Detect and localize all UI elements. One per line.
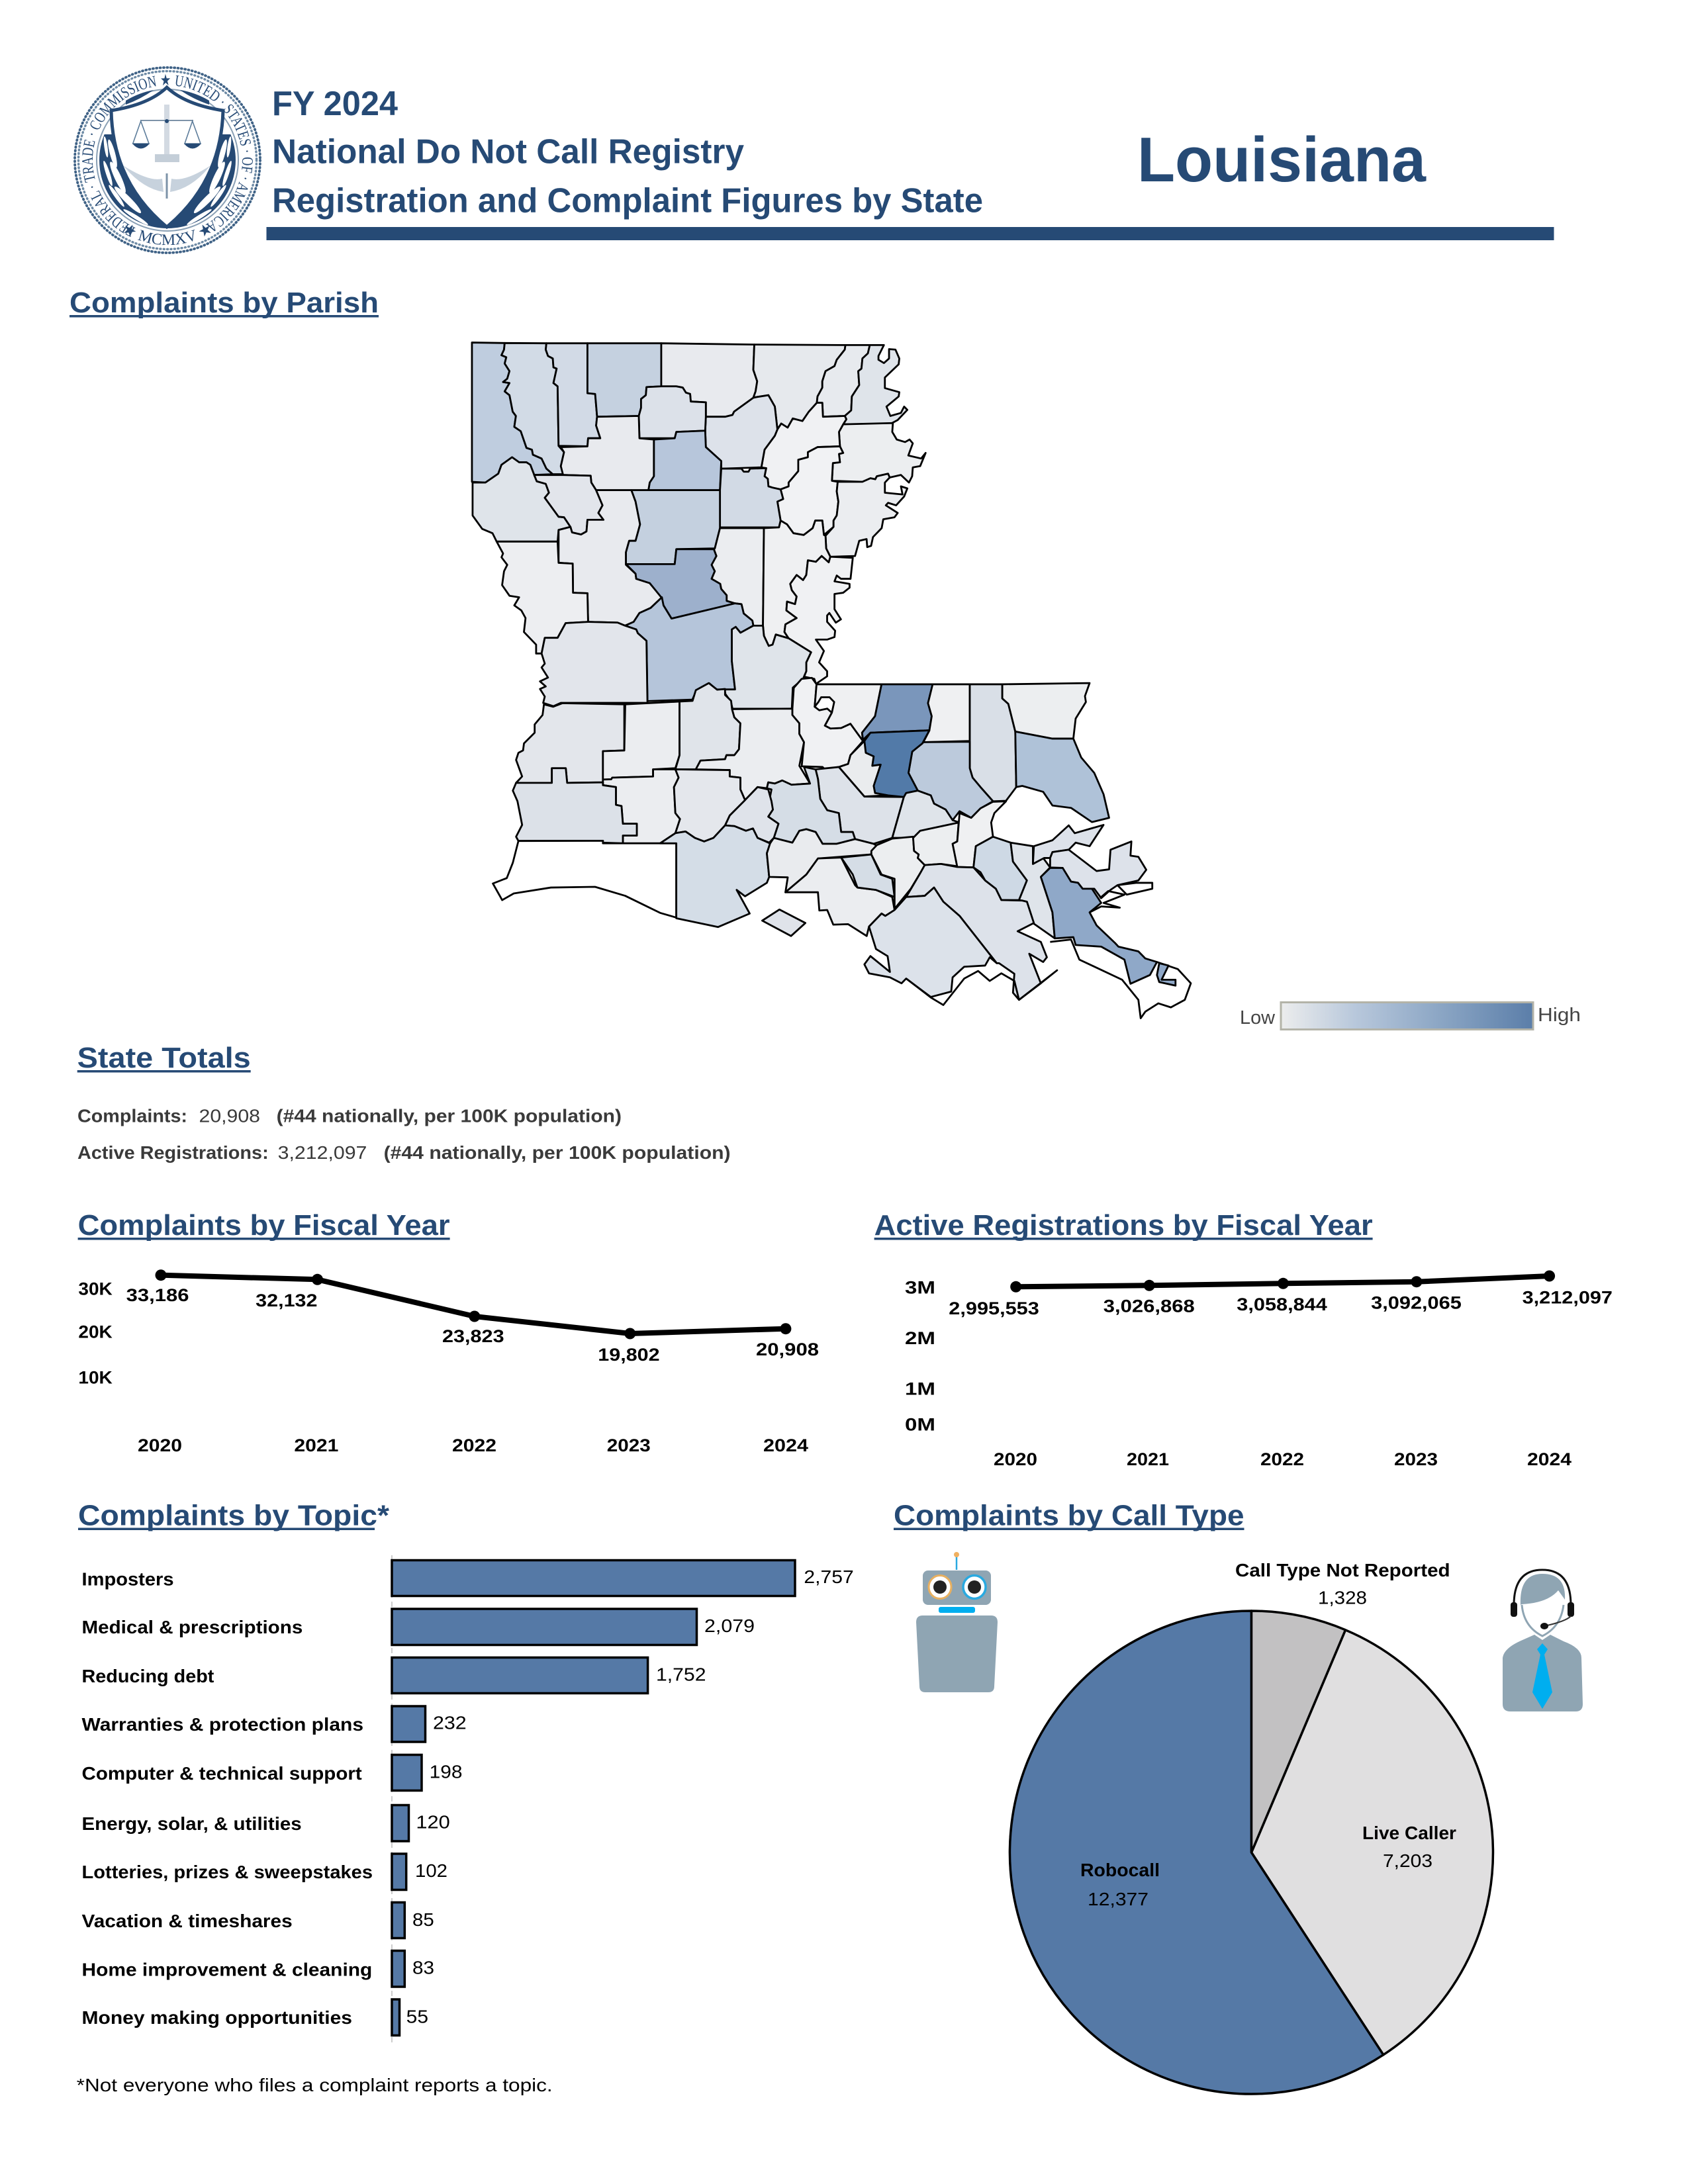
parish: Lincoln xyxy=(639,387,706,438)
topic: Lotteries, prizes & sweepstakes: 102 xyxy=(415,1860,447,1881)
parish: Calcasieu xyxy=(513,768,637,843)
data labels: 20,908 xyxy=(756,1340,819,1359)
x axis labels: 2020 xyxy=(138,1435,182,1455)
parish: Morehouse xyxy=(753,345,845,430)
parish: Terrebonne xyxy=(865,887,997,997)
topic: Lotteries, prizes & sweepstakes xyxy=(82,1854,447,1890)
x axis labels: 2023 xyxy=(1394,1449,1438,1469)
parish: St. Mary xyxy=(786,858,894,936)
heading: active registrations by fiscal year: Active Registrations by Fiscal Year xyxy=(874,1209,1373,1242)
parish: La Salle xyxy=(712,528,764,625)
data labels xyxy=(949,1287,1613,1318)
parish: Bienville xyxy=(561,416,654,490)
header rule xyxy=(266,227,1554,240)
heading: fiscal year: FY 2024 xyxy=(272,85,398,123)
x axis labels: 2022 xyxy=(452,1435,496,1455)
topic: Lotteries, prizes & sweepstakes: Lotteries, prizes & sweepstakes xyxy=(82,1862,373,1882)
topic: Medical & prescriptions: Medical & prescriptions xyxy=(82,1617,303,1637)
slice: live caller xyxy=(1251,1630,1493,2055)
bar axis xyxy=(391,1555,393,2042)
parish: Tangipahoa xyxy=(970,684,1016,801)
topic: Home improvement & cleaning xyxy=(82,1951,434,1987)
data labels xyxy=(126,1285,819,1365)
x axis labels: 2020 xyxy=(994,1449,1037,1469)
parish: Washington xyxy=(1002,683,1090,739)
footnote: *Not everyone who files a complaint reports a topic. xyxy=(77,2075,553,2095)
topic: Money making opportunities: 55 xyxy=(406,2007,428,2027)
topic: Imposters xyxy=(82,1561,854,1596)
state totals: active registrations: Active Registrations: xyxy=(77,1142,269,1163)
parish: Lafourche xyxy=(906,864,1047,1000)
topic: Money making opportunities xyxy=(82,1999,428,2036)
topic: Warranties & protection plans: Warranties & protection plans xyxy=(82,1714,363,1735)
parish: Franklin xyxy=(777,446,843,535)
topic: Warranties & protection plans xyxy=(82,1706,467,1742)
parish: St. Charles xyxy=(953,801,1006,868)
parish: Concordia xyxy=(784,556,853,684)
coast: delta mouth xyxy=(1157,963,1176,985)
parish: Livingston xyxy=(908,742,993,820)
parish: Claiborne xyxy=(587,343,661,417)
parish: Assumption xyxy=(841,854,894,897)
state totals: complaints: Complaints: xyxy=(77,1106,187,1126)
legend: low label: Low xyxy=(1240,1007,1276,1028)
label: call type not reported: 1,328 xyxy=(1318,1587,1367,1608)
topic: Reducing debt: 1,752 xyxy=(656,1664,706,1685)
parish: West Baton Rouge xyxy=(839,741,888,797)
y axis labels: 0M xyxy=(905,1415,935,1435)
y axis labels: 3M xyxy=(905,1277,935,1297)
topic: Home improvement & cleaning: Home improvement & cleaning xyxy=(82,1960,372,1980)
parish: De Soto xyxy=(473,457,571,541)
x axis labels: 2024 xyxy=(1527,1449,1571,1469)
legend: gradient bar xyxy=(1281,1002,1533,1030)
legend: high label: High xyxy=(1538,1005,1581,1026)
y axis labels: 2M xyxy=(905,1328,935,1348)
legend xyxy=(1240,1002,1581,1030)
title block xyxy=(272,85,983,220)
parish: Iberville xyxy=(816,767,904,844)
y axis labels: 10K xyxy=(78,1368,113,1388)
state totals: complaints: 20,908 xyxy=(199,1106,260,1126)
heading: complaints by fiscal year: Complaints by Fiscal Year xyxy=(78,1209,450,1242)
label: live caller: Live Caller xyxy=(1362,1823,1456,1843)
choropleth map of Louisiana parishes xyxy=(472,343,1191,1019)
topic: Reducing debt xyxy=(82,1657,706,1693)
data labels: 3,212,097 xyxy=(1523,1287,1613,1307)
parish: West Feliciana xyxy=(815,684,882,741)
topic: Computer & technical support: Computer & technical support xyxy=(82,1763,362,1784)
parish: Grant xyxy=(626,549,735,619)
parish: Plaquemines xyxy=(1041,868,1157,983)
topic: Energy, solar, & utilities: 120 xyxy=(416,1812,450,1833)
topic: Vacation & timeshares: 85 xyxy=(412,1909,434,1930)
parish: West Carroll xyxy=(817,345,870,417)
x axis labels xyxy=(138,1435,808,1455)
parish: East Baton Rouge xyxy=(865,731,929,797)
map: southern parishes xyxy=(493,678,1191,1019)
parish: Union xyxy=(661,343,757,417)
slice: call type not reported xyxy=(1251,1611,1345,1852)
data labels: 3,026,868 xyxy=(1103,1297,1195,1316)
parish: Beauregard xyxy=(516,703,624,783)
data line xyxy=(155,1269,791,1340)
map: northern parishes xyxy=(472,343,925,709)
parish: Marsh Island xyxy=(762,909,806,936)
parish: Jefferson south xyxy=(1011,842,1055,938)
heading: complaints by parish: Complaints by Parish xyxy=(70,287,379,319)
label: call type not reported xyxy=(1235,1560,1450,1608)
label: live caller xyxy=(1362,1823,1456,1871)
parish: Ascension xyxy=(892,791,960,838)
topic: Energy, solar, & utilities: Energy, solar, & utilities xyxy=(82,1813,302,1834)
label: live caller: 7,203 xyxy=(1383,1850,1432,1871)
data labels: 2,995,553 xyxy=(949,1298,1039,1318)
parish: Jefferson xyxy=(974,837,1027,900)
y axis labels: 30K xyxy=(78,1279,113,1299)
parish: St. Bernard xyxy=(1050,841,1147,898)
topic: Vacation & timeshares: Vacation & timeshares xyxy=(82,1911,293,1931)
label: robocall: Robocall xyxy=(1080,1860,1160,1880)
parish: Vermilion xyxy=(660,825,770,927)
parish: Evangeline xyxy=(675,683,740,769)
x axis labels: 2021 xyxy=(294,1435,338,1455)
parish: Allen xyxy=(603,702,680,780)
data line xyxy=(1010,1271,1555,1293)
label: call type not reported: Call Type Not Reported xyxy=(1235,1560,1450,1580)
topic: Warranties & protection plans: 232 xyxy=(433,1713,467,1733)
bar chart: complaints by topic xyxy=(82,1555,854,2042)
parish: St. James xyxy=(871,837,925,909)
topic: Medical & prescriptions: 2,079 xyxy=(704,1615,755,1636)
parish: Bossier xyxy=(502,343,564,475)
parish: Catahoula xyxy=(763,521,830,646)
parish: Lafayette xyxy=(725,787,778,842)
x axis labels: 2022 xyxy=(1260,1449,1304,1469)
parish: Natchitoches xyxy=(559,490,662,625)
parish: St. Tammany xyxy=(1015,731,1109,822)
parish: St. Landry xyxy=(696,709,810,800)
state totals: active registrations: (#44 nationally, per 100K population) xyxy=(384,1142,731,1163)
coast: eastern marsh xyxy=(1117,883,1152,895)
parish: Rapides xyxy=(625,597,753,701)
parish: Pointe Coupee xyxy=(792,678,863,769)
data labels: 19,802 xyxy=(598,1345,660,1365)
topic: Medical & prescriptions xyxy=(82,1609,755,1645)
topic: Imposters: 2,757 xyxy=(804,1567,854,1587)
parish: Caddo xyxy=(472,343,553,482)
parish: Red River xyxy=(534,475,604,535)
parish: Webster xyxy=(545,343,600,446)
heading: registry name: National Do Not Call Registry xyxy=(272,133,744,171)
parish: Jefferson Davis xyxy=(603,769,680,843)
parish: Caldwell xyxy=(720,468,783,527)
parish: Madison xyxy=(832,423,925,482)
topic: Reducing debt: Reducing debt xyxy=(82,1666,214,1686)
line chart: active registrations by fiscal year xyxy=(905,1271,1613,1469)
parish: Acadia xyxy=(674,769,745,841)
label: robocall xyxy=(1080,1860,1160,1909)
heading: complaints by topic: Complaints by Topic* xyxy=(78,1500,390,1531)
line chart: complaints by fiscal year xyxy=(78,1269,819,1455)
data labels: 3,058,844 xyxy=(1237,1295,1327,1314)
parish: Sabine xyxy=(496,541,588,653)
state totals: complaints xyxy=(77,1106,622,1126)
topic: Money making opportunities: Money making opportunities xyxy=(82,2007,352,2028)
parish: St. Helena xyxy=(923,684,970,742)
parish: Iberia xyxy=(767,829,877,892)
x axis labels xyxy=(994,1449,1571,1469)
label: robocall: 12,377 xyxy=(1088,1889,1149,1909)
coast: barrier outline xyxy=(906,970,1057,1005)
topic: Energy, solar, & utilities xyxy=(82,1805,450,1841)
icon: FTC seal: ★ MCMXV ★ xyxy=(124,225,211,245)
topic: Vacation & timeshares xyxy=(82,1902,434,1938)
state totals: active registrations: 3,212,097 xyxy=(278,1142,367,1163)
parish: Jackson xyxy=(649,431,722,490)
data labels: 23,823 xyxy=(442,1326,504,1346)
topic: Computer & technical support xyxy=(82,1755,462,1791)
parish: East Carroll xyxy=(843,345,908,424)
parish: Richland xyxy=(761,403,847,489)
parish: Vernon xyxy=(540,622,647,706)
icon: live caller agent xyxy=(1503,1570,1583,1711)
data labels: 33,186 xyxy=(126,1285,189,1305)
parish: St. Martin xyxy=(767,767,855,844)
parish: Tensas xyxy=(825,474,908,557)
state totals: complaints: (#44 nationally, per 100K population) xyxy=(277,1106,622,1126)
pie chart: complaints by call type xyxy=(1010,1611,1493,2094)
coast: marsh spit xyxy=(1090,891,1125,913)
parish: Avoyelles xyxy=(724,625,811,709)
heading: state totals: State Totals xyxy=(77,1042,251,1074)
icon: robot xyxy=(916,1552,998,1692)
y axis labels: 1M xyxy=(905,1379,935,1398)
parish: St. John the Baptist xyxy=(913,823,959,866)
data labels: 3,092,065 xyxy=(1371,1293,1462,1312)
state name: Louisiana xyxy=(1137,124,1427,195)
parish: Winn xyxy=(626,490,720,564)
parish: East Feliciana xyxy=(862,684,933,740)
parish: Cameron xyxy=(493,841,677,917)
y axis labels: 20K xyxy=(78,1322,113,1342)
x axis labels: 2024 xyxy=(763,1435,808,1455)
x axis labels: 2021 xyxy=(1127,1449,1169,1469)
coast: delta outline xyxy=(1050,940,1191,1019)
topic: Home improvement & cleaning: 83 xyxy=(412,1958,434,1978)
y axis labels xyxy=(905,1277,935,1435)
slice: robocall xyxy=(1010,1611,1383,2094)
icon: FTC seal: FEDERAL · TRADE · COMMISSION ★ UNITED · STATES · OF · AMERICA xyxy=(82,74,253,237)
y axis labels xyxy=(78,1279,113,1388)
heading: report subtitle: Registration and Complaint Figures by State xyxy=(272,182,983,220)
x axis labels: 2023 xyxy=(607,1435,651,1455)
data labels: 32,132 xyxy=(256,1291,318,1310)
parish: Orleans xyxy=(1033,825,1103,864)
heading: complaints by call type: Complaints by Call Type xyxy=(894,1500,1244,1531)
state totals: active registrations xyxy=(77,1142,731,1163)
parish: Ouachita xyxy=(705,395,777,469)
topic: Imposters: Imposters xyxy=(82,1569,173,1590)
topic: Computer & technical support: 198 xyxy=(430,1762,462,1782)
